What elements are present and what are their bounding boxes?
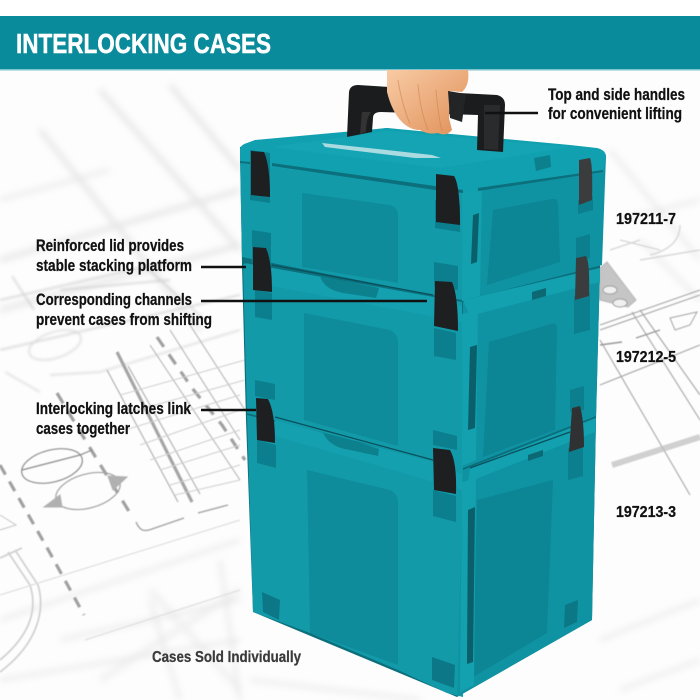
- title: INTERLOCKING CASES: [16, 28, 271, 59]
- case 197212-5 (middle): [243, 263, 600, 470]
- hand gripping handle: [387, 70, 468, 134]
- handle: [347, 85, 505, 152]
- dashed column lines: [157, 337, 245, 460]
- callout: reinforced lid: Reinforced lid provides: [36, 237, 184, 255]
- model number 197211-7: 197211-7: [616, 211, 676, 228]
- case 197211-7 (top): [240, 128, 606, 301]
- lid: [240, 128, 606, 192]
- latch channels: [250, 150, 593, 522]
- dark backing silhouette: [240, 128, 606, 697]
- callout: interlocking latches: Interlocking latches link: [36, 400, 192, 418]
- callout: stacking platform: stable stacking platform: [36, 257, 192, 275]
- right-side drawing lines: [600, 290, 700, 495]
- header band: [0, 16, 700, 70]
- callout: cases together: cases together: [36, 420, 130, 438]
- footnote: Cases Sold Individually: [152, 649, 301, 666]
- model number 197213-3: 197213-3: [616, 504, 676, 521]
- model number 197212-5: 197212-5: [616, 349, 676, 366]
- product: stack of three cases: [240, 70, 606, 697]
- logo on lid: [322, 143, 441, 158]
- hatched wall block: [107, 366, 200, 502]
- case seams: [272, 265, 570, 468]
- callout: prevent shifting: prevent cases from shifting: [36, 311, 212, 329]
- leader lines: [201, 113, 538, 410]
- callout: corresponding channels: Corresponding channels: [36, 291, 192, 309]
- section markers: [18, 443, 86, 489]
- black latches: [251, 151, 592, 494]
- feet: [262, 592, 578, 688]
- curved duct: [0, 548, 41, 672]
- case 197213-3 (bottom): [247, 415, 596, 697]
